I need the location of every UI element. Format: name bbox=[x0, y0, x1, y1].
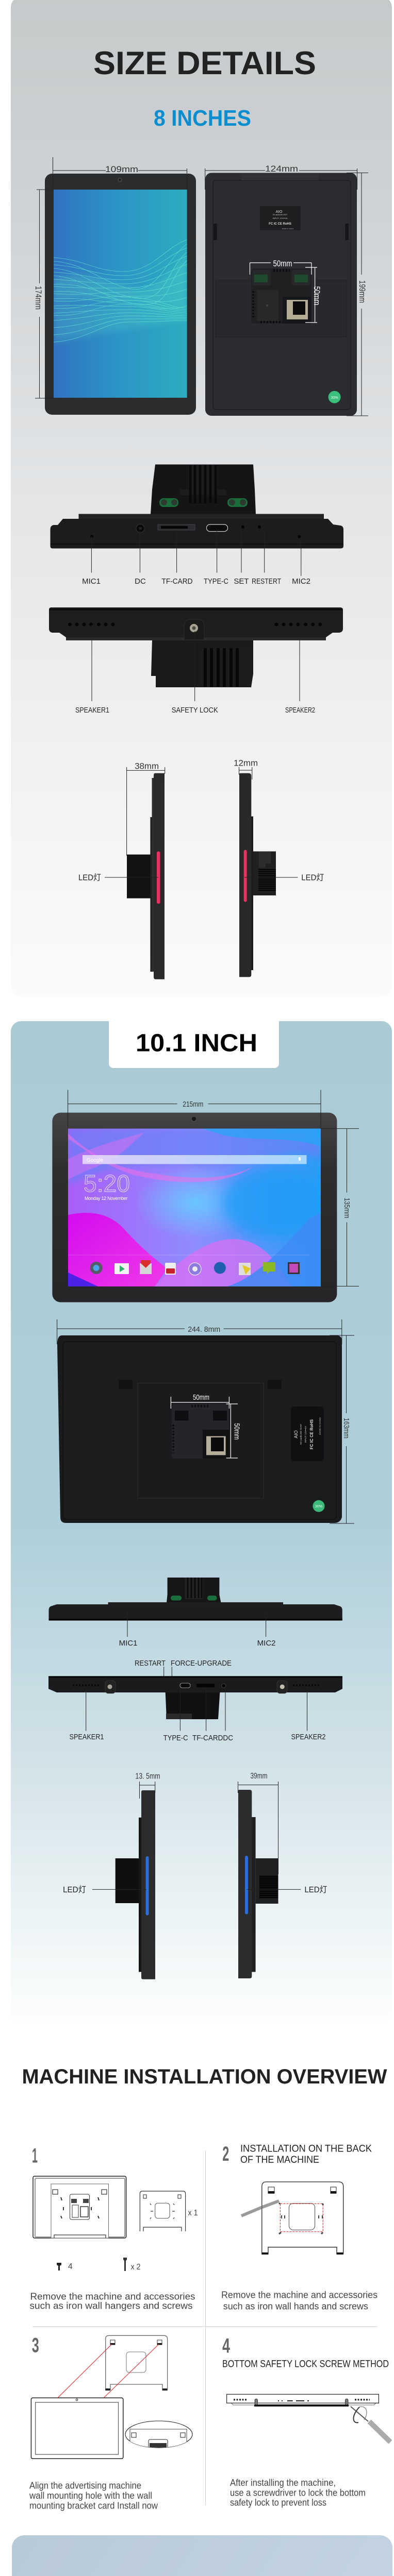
subtitle: 8 inches: 8 INCHES bbox=[154, 106, 251, 131]
bottom edge view bbox=[49, 607, 343, 687]
restart and force-upgrade callouts bbox=[135, 1659, 232, 1685]
dimension: 39mm depth bbox=[238, 1772, 278, 1874]
left side view with LED bbox=[127, 773, 165, 979]
dimension: 163mm height bbox=[330, 1335, 354, 1523]
dimension: 50mm module width and height: 50mm bbox=[273, 259, 292, 268]
icon: short screw x 4: 4 bbox=[68, 2262, 73, 2271]
microphone callouts: MIC2 bbox=[257, 1639, 276, 1648]
dimension: 13.5mm depth: 13. 5mm bbox=[135, 1772, 160, 1781]
diagram: tablet front bbox=[31, 2398, 123, 2459]
heading tab: 10.1 inch: 10.1 INCH bbox=[136, 1029, 257, 1057]
step number 4: 4 bbox=[222, 2335, 231, 2358]
port callout labels: MIC2 bbox=[292, 577, 310, 586]
section: machine installation overview bbox=[22, 2065, 390, 2511]
caption step 2: such as iron wall hands and screws bbox=[223, 2301, 368, 2311]
quantity x 1: x 1 bbox=[188, 2209, 198, 2217]
caption step 1: such as iron wall hangers and screws bbox=[30, 2301, 193, 2311]
device rating label rotated bbox=[291, 1406, 324, 1461]
dimension: 12mm bezel depth: 12mm bbox=[234, 758, 258, 768]
back view of 10.1 inch tablet bbox=[57, 1335, 342, 1523]
icon: safety lock screw bbox=[184, 619, 204, 640]
panel: 10.1 inch size details bbox=[11, 1021, 392, 2022]
speaker and safety lock callouts bbox=[75, 624, 315, 715]
right side view with blue LED bbox=[238, 1790, 278, 1978]
diagram: bracket outline bbox=[106, 2335, 168, 2391]
caption step 3 bbox=[29, 2481, 158, 2511]
top edge view with ports bbox=[51, 465, 343, 548]
step 1: 1 bbox=[32, 2145, 38, 2167]
port callout labels: RESTERT bbox=[252, 577, 281, 586]
app dock icons bbox=[90, 1260, 300, 1275]
icon: green sticker bbox=[329, 391, 341, 403]
title: size details: SIZE DETAILS bbox=[93, 45, 316, 81]
LED label right: LED灯 bbox=[301, 873, 324, 883]
icon: long screw x 2 bbox=[123, 2258, 141, 2272]
left safety lock screw bbox=[105, 1681, 116, 1693]
restart and force-upgrade callouts: RESTART bbox=[135, 1659, 166, 1668]
step number 2: 2 bbox=[222, 2143, 229, 2165]
step 3 bbox=[29, 2334, 192, 2511]
port callout labels bbox=[82, 530, 310, 586]
clock: Monday 12 November bbox=[85, 1196, 128, 1201]
clock bbox=[84, 1175, 129, 1201]
microphone callouts bbox=[119, 1612, 276, 1648]
LED label left: LED灯 bbox=[63, 1885, 86, 1894]
icon: green sticker: 30% bbox=[315, 1505, 322, 1509]
device rating label rotated: FC IC CE RoHS bbox=[309, 1419, 314, 1449]
panel: application scenario diagram bbox=[12, 2535, 392, 2576]
dimension: 135mm height bbox=[321, 1129, 359, 1286]
dimension: 199mm height: 199mm bbox=[357, 280, 367, 303]
step 2 heading: OF THE MACHINE bbox=[240, 2155, 319, 2165]
dimension: 38mm depth bbox=[127, 761, 165, 856]
screwdriver with rotation arrow bbox=[351, 2406, 390, 2442]
dimension: 39mm depth: 39mm bbox=[251, 1772, 267, 1781]
caption step 3: wall mounting hole with the wall bbox=[29, 2490, 152, 2501]
search bar: Google bbox=[87, 1158, 104, 1163]
caption step 4 bbox=[230, 2478, 366, 2507]
dimension: 135mm height: 135mm bbox=[342, 1198, 351, 1218]
dimension: 50mm module width and height: 50mm bbox=[312, 286, 322, 305]
panel: 8 inches size details bbox=[11, 0, 392, 997]
step number 3: 3 bbox=[32, 2334, 39, 2357]
dimension: 38mm depth: 38mm bbox=[135, 761, 159, 771]
back view of 8 inch tablet bbox=[205, 173, 357, 416]
port callout labels: TF-CARD bbox=[162, 577, 193, 586]
dimension: 215mm width bbox=[68, 1090, 321, 1129]
alignment lines bbox=[58, 2344, 159, 2398]
heading tab: 10.1 inch bbox=[109, 1021, 279, 1068]
device rating label bbox=[260, 206, 301, 230]
dimension: 50mm module bbox=[171, 1393, 241, 1458]
device rating label: MADE IN CHINA bbox=[282, 228, 293, 230]
port and speaker callouts: TF-CARDDC bbox=[192, 1734, 233, 1742]
port callout labels: MIC1 bbox=[82, 577, 101, 586]
device rating label: SD card/USB HOST bbox=[273, 214, 287, 216]
dimension: 109mm width bbox=[53, 157, 187, 190]
dimension: 50mm module: 50mm bbox=[193, 1393, 209, 1402]
step 2 heading: INSTALLATION ON THE BACK bbox=[240, 2144, 372, 2155]
caption step 3: mounting bracket card Install now bbox=[29, 2500, 158, 2511]
front view of 8 inch tablet bbox=[45, 174, 196, 415]
diagram: bottom edge with safety locks bbox=[227, 2394, 390, 2442]
icon: long screw x 2: x 2 bbox=[131, 2263, 141, 2272]
right side view with LED bbox=[239, 773, 276, 977]
port callout labels: TYPE-C bbox=[204, 577, 228, 586]
device rating label: FC IC CE RoHS bbox=[269, 223, 291, 226]
caption step 4: After installing the machine, bbox=[230, 2478, 336, 2488]
dimension: 244.8mm width bbox=[57, 1319, 342, 1344]
caption step 4: safety lock to prevent loss bbox=[230, 2497, 326, 2507]
bottom edge view with ports bbox=[48, 1676, 342, 1719]
port callout labels: SET bbox=[234, 577, 249, 586]
tablet screen wallpaper bbox=[68, 1128, 325, 1286]
device rating label rotated: AIO bbox=[293, 1430, 299, 1438]
step 2 heading bbox=[240, 2144, 372, 2165]
icon: green sticker bbox=[313, 1500, 325, 1512]
mounting module bbox=[172, 1404, 229, 1459]
device rating label rotated: MADE IN CHINA bbox=[319, 1417, 321, 1435]
mounting module bbox=[251, 268, 311, 324]
dimension: 124mm width: 124mm bbox=[265, 164, 298, 174]
left side view with blue LED bbox=[116, 1790, 155, 1979]
step 2 bbox=[221, 2143, 377, 2311]
icon: green sticker: 30% bbox=[331, 396, 338, 400]
dimension: 124mm width bbox=[205, 164, 357, 190]
dimension: 174mm height bbox=[34, 190, 53, 398]
search bar bbox=[83, 1155, 306, 1164]
dimension: 109mm width: 109mm bbox=[105, 164, 138, 174]
dimension: 50mm module width and height bbox=[250, 259, 322, 323]
caption step 1 bbox=[30, 2291, 195, 2311]
speaker and safety lock callouts: SPEAKER1 bbox=[75, 706, 109, 715]
dimension: 174mm height: 174mm bbox=[34, 286, 43, 310]
front view of 10.1 inch tablet bbox=[52, 1113, 337, 1302]
caption step 2: Remove the machine and accessories bbox=[221, 2290, 377, 2300]
caption step 4: use a screwdriver to lock the bottom bbox=[230, 2487, 366, 2498]
microphone callouts: MIC1 bbox=[119, 1639, 137, 1648]
device rating label: AIO bbox=[276, 209, 283, 214]
port callout labels: DC bbox=[135, 577, 146, 586]
caption step 2 bbox=[221, 2290, 377, 2311]
icon: short screw x 4 bbox=[57, 2262, 73, 2271]
port and speaker callouts bbox=[69, 1687, 326, 1742]
dimension: 12mm bezel depth bbox=[234, 758, 258, 779]
caption step 1: Remove the machine and accessories bbox=[30, 2291, 195, 2301]
diagram: machine back with bracket bbox=[33, 2176, 126, 2238]
dimension: 13.5mm depth bbox=[135, 1772, 160, 1799]
device rating label rotated: SD card/USB HOST bbox=[300, 1423, 302, 1445]
heading: machine installation overview: MACHINE INSTALLATION OVERVIEW bbox=[22, 2065, 387, 2088]
dimension: 244.8mm width: 244. 8mm bbox=[188, 1325, 220, 1334]
step 4 bbox=[222, 2335, 390, 2507]
top edge view with microphones bbox=[48, 1578, 342, 1620]
speaker and safety lock callouts: SPEAKER2 bbox=[285, 706, 315, 715]
dimension: 215mm width: 215mm bbox=[183, 1100, 203, 1109]
detail callout ellipse bbox=[125, 2420, 193, 2448]
dimension: 163mm height: 163mm bbox=[342, 1418, 351, 1438]
speaker and safety lock callouts: SAFETY LOCK bbox=[172, 706, 218, 715]
caption step 3: Align the advertising machine bbox=[29, 2481, 141, 2491]
port and speaker callouts: SPEAKER1 bbox=[69, 1733, 104, 1741]
dimension: 50mm module: 50mm bbox=[232, 1423, 241, 1439]
screwdriver bbox=[241, 2201, 279, 2216]
device rating label: INPUT: 12V⎓2A bbox=[273, 217, 288, 219]
restart and force-upgrade callouts: FORCE-UPGRADE bbox=[171, 1659, 232, 1668]
diagram: wall bracket accessory bbox=[140, 2191, 186, 2231]
clock: 5:20 bbox=[84, 1170, 130, 1197]
device rating label rotated: INPUT: 12V⎓2A bbox=[304, 1426, 307, 1443]
step 1 bbox=[30, 2145, 198, 2311]
LED label left: LED灯 bbox=[78, 873, 101, 883]
right safety lock screw bbox=[277, 1681, 287, 1693]
dimension: 199mm height bbox=[347, 173, 368, 416]
diagram: bracket screw fixing bbox=[241, 2182, 343, 2255]
port and speaker callouts: SPEAKER2 bbox=[291, 1733, 326, 1741]
port and speaker callouts: TYPE-C bbox=[163, 1734, 188, 1742]
LED label right: LED灯 bbox=[304, 1885, 327, 1894]
